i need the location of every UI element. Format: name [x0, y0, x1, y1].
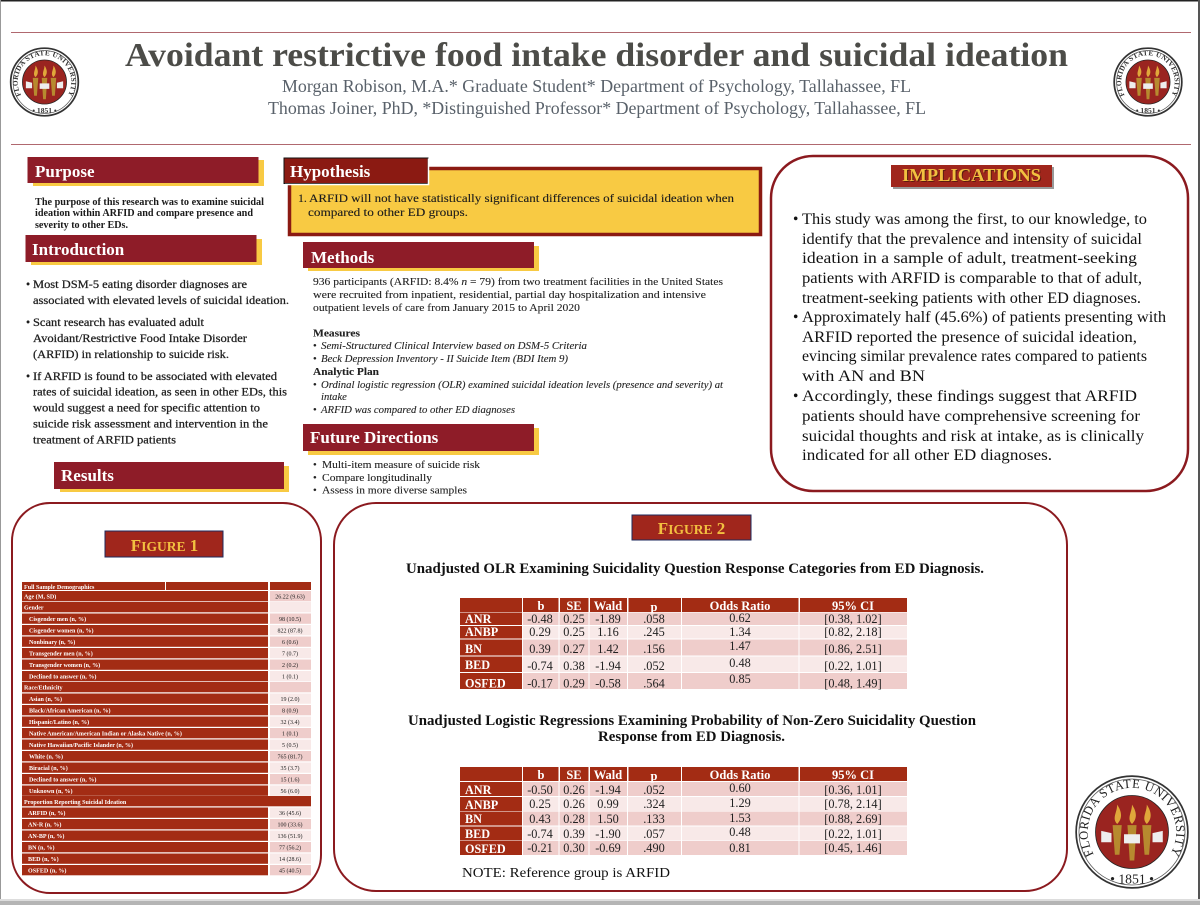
- table: demographics: 77 (56.2): [279, 844, 301, 852]
- heading: Hypothesis: [284, 158, 428, 184]
- table: demographics: AN-R (n, %): [28, 822, 61, 828]
- authors: Morgan Robison, M.A.* Graduate Student* Department of Psychology, Tallahassee, FL: [282, 76, 911, 96]
- table: OLR results: BN: [465, 642, 482, 656]
- table: logistic regression results: OSFED: [465, 842, 506, 856]
- heading: Results: [54, 462, 289, 492]
- table: logistic regression results: -1.94: [595, 783, 621, 797]
- table: demographics: Proportion Reporting Suicidal Ideation: [24, 800, 127, 806]
- panel: implications: patients should have comprehensive screening for: [802, 408, 1140, 425]
- panel: implications: Accordingly, these findings suggest that ARFID: [802, 388, 1137, 405]
- text: methods: ARFID was compared to other ED diagnoses: [320, 405, 515, 416]
- table: OLR results: 0.85: [729, 672, 751, 686]
- text: methods: 936 participants (ARFID: 8.4% n = 79) from two treatment facilities in the United States: [313, 277, 723, 288]
- table: demographics: 765 (81.7): [278, 754, 302, 760]
- table: demographics: 100 (33.6): [278, 822, 302, 828]
- table title: logistic regressions: Response from ED Diagnosis.: [598, 729, 785, 745]
- text: introduction bullets: Scant research has evaluated adult: [33, 315, 205, 329]
- table: demographics: [22, 582, 311, 875]
- table: demographics: Cisgender women (n, %): [29, 628, 94, 634]
- table: logistic regression results: [0.36, 1.01]: [824, 783, 882, 797]
- table: logistic regression results: -0.50: [527, 783, 553, 797]
- table: OLR results: 0.27: [563, 642, 585, 656]
- table: logistic regression results: 0.48: [729, 825, 751, 839]
- table: demographics: Cisgender men (n, %): [29, 616, 86, 623]
- table: OLR results: -0.58: [595, 676, 621, 690]
- table: logistic regression results: 0.39: [563, 827, 585, 841]
- table: logistic regression results: [0.45, 1.46]: [824, 841, 882, 855]
- table: logistic regression results: 0.30: [563, 841, 585, 855]
- table: demographics: 19 (2.0): [280, 696, 300, 703]
- panel: implications: suicidal thoughts and risk at intake, as is clinically: [802, 428, 1144, 445]
- panel: implications: •: [793, 309, 798, 326]
- table: logistic regression results: .052: [643, 783, 665, 797]
- panel: hypothesis: compared to other ED groups.: [308, 205, 468, 219]
- table: demographics: Asian (n, %): [29, 696, 62, 703]
- text: introduction bullets: (ARFID) in relationship to suicide risk.: [33, 347, 229, 361]
- table: logistic regression results: Wald: [594, 768, 622, 782]
- text: future directions: •: [313, 486, 317, 496]
- table: demographics: Transgender women (n, %): [29, 662, 100, 669]
- text: methods: Analytic Plan: [313, 367, 379, 378]
- table: OLR results: BED: [465, 658, 490, 672]
- table: demographics: 822 (87.8): [278, 628, 302, 634]
- heading: Figure 2: FIGURE 2: [658, 519, 725, 538]
- table: demographics: BED (n, %): [28, 856, 59, 863]
- table: logistic regression results: [0.88, 2.69]: [824, 812, 882, 826]
- text: introduction bullets: Most DSM-5 eating disorder diagnoses are: [33, 277, 247, 291]
- panel: hypothesis: 1.: [298, 191, 307, 205]
- heading: Introduction: [26, 235, 262, 265]
- table: logistic regression results: p: [651, 769, 658, 783]
- table: demographics: 1 (0.1): [282, 674, 298, 680]
- table: logistic regression results: 0.60: [729, 781, 751, 795]
- panel: implications: [771, 156, 1188, 491]
- table: logistic regression results: -0.74: [527, 827, 553, 841]
- authors: Thomas Joiner, PhD, *Distinguished Professor* Department of Psychology, Tallahassee, FL: [268, 98, 926, 118]
- text: future directions: Multi-item measure of suicide risk: [322, 460, 481, 471]
- table title: OLR: Unadjusted OLR Examining Suicidality Question Response Categories from ED Diagnosis.: [406, 561, 984, 577]
- table: OLR results: ANBP: [465, 625, 499, 639]
- heading: Implications: [891, 165, 1054, 189]
- table: demographics: 56 (6.0): [280, 788, 300, 795]
- table: OLR results: 0.48: [729, 656, 751, 670]
- table: demographics: 136 (51.9): [278, 833, 302, 840]
- table: OLR results: .052: [643, 659, 665, 673]
- heading: Figure 1: FIGURE 1: [131, 536, 198, 555]
- table: OLR results: b: [538, 599, 545, 613]
- text: methods: Measures: [313, 328, 360, 340]
- table: demographics: 45 (40.5): [279, 868, 301, 874]
- table: demographics: 35 (3.7): [280, 765, 300, 772]
- heading: Purpose: Purpose: [35, 162, 95, 181]
- panel: implications: Approximately half (45.6%) of patients presenting with: [802, 309, 1166, 326]
- text: methods: were recruited from inpatient, residential, partial day hospitalization and intensive: [313, 290, 706, 301]
- logo: FSU seal top right: FLORIDA STATE UNIVERSITY: [1116, 50, 1180, 98]
- heading: Future Directions: Future Directions: [310, 428, 439, 447]
- table: demographics: Unknown (n, %): [29, 788, 73, 795]
- table: demographics: 32 (3.4): [280, 719, 300, 726]
- table: OLR results: 1.42: [597, 642, 619, 656]
- text: future directions: •: [313, 460, 317, 471]
- table: logistic regression results: ANR: [465, 783, 492, 797]
- table: OLR results: 95% CI: [832, 599, 874, 613]
- table: demographics: Age (M, SD): [24, 594, 56, 600]
- table: logistic regression results: .133: [643, 812, 665, 826]
- panel: implications: •: [793, 211, 798, 228]
- table: OLR results: .564: [643, 676, 665, 690]
- table: demographics: White (n, %): [29, 754, 63, 760]
- panel: figure 2: [334, 503, 1067, 891]
- text: future directions: Compare longitudinally: [322, 473, 433, 484]
- table: logistic regression results: 0.25: [529, 797, 551, 811]
- heading: Future Directions: [303, 424, 539, 455]
- table: logistic regression results: 1.50: [597, 812, 619, 826]
- table: OLR results: SE: [566, 599, 582, 613]
- heading: Methods: Methods: [311, 248, 375, 267]
- text: introduction bullets: associated with elevated levels of suicidal ideation.: [33, 293, 289, 307]
- table: demographics: Gender: [24, 606, 44, 612]
- table: logistic regression results: 1.29: [729, 796, 751, 810]
- table: demographics: 1 (0.1): [282, 730, 298, 738]
- text: introduction bullets: Avoidant/Restrictive Food Intake Disorder: [33, 331, 247, 345]
- heading: Methods: [303, 242, 539, 271]
- table: logistic regression results: 0.26: [563, 797, 585, 811]
- table: OLR results: 0.25: [563, 625, 585, 639]
- table: demographics: 8 (0.9): [282, 708, 298, 714]
- table: logistic regression results: .057: [643, 827, 665, 841]
- table: demographics: Declined to answer (n, %): [29, 674, 96, 680]
- table: OLR results: 0.39: [529, 642, 551, 656]
- logo: FSU seal top left: • 1851 •: [32, 106, 57, 115]
- table: logistic regression results: b: [538, 768, 545, 782]
- panel: implications: ARFID reported the presence of suicidal ideation,: [802, 329, 1137, 346]
- heading: Figure 1: [105, 531, 223, 557]
- table: OLR results: .156: [643, 642, 665, 656]
- table: demographics: Biracial (n, %): [29, 765, 68, 772]
- table: OLR results: 1.16: [597, 625, 619, 639]
- table: logistic regression results: 95% CI: [832, 768, 874, 782]
- table: logistic regression results: [0.78, 2.14]: [824, 797, 882, 811]
- table: logistic regression results: 0.43: [529, 812, 551, 826]
- text: introduction bullets: [26, 277, 289, 446]
- text: purpose: severity to other EDs.: [35, 220, 128, 231]
- text: introduction bullets: If ARFID is found to be associated with elevated: [33, 369, 277, 383]
- table: OLR results: ANR: [465, 612, 492, 626]
- panel: implications: identify that the prevalence and intensity of suicidal: [802, 231, 1142, 248]
- text: methods: •: [313, 354, 317, 365]
- text: methods: •: [313, 380, 317, 391]
- table: logistic regression results: 0.26: [563, 783, 585, 797]
- table: demographics: 7 (0.7): [282, 650, 298, 658]
- table: demographics: 15 (1.6): [280, 776, 300, 784]
- table: OLR results: 0.29: [563, 676, 585, 690]
- table: demographics: Nonbinary (n, %): [29, 639, 75, 646]
- panel: hypothesis: ARFID will not have statistically significant differences of suicidal ideation when: [309, 191, 734, 205]
- table title: logistic regressions: [408, 713, 976, 745]
- heading: Hypothesis: Hypothesis: [290, 162, 371, 181]
- table: OLR results: -0.17: [527, 676, 553, 690]
- table: demographics: 14 (28.6): [279, 856, 301, 863]
- title: Avoidant restrictive food intake disorder and suicidal ideation: [125, 37, 1068, 74]
- panel: implications: •: [793, 388, 798, 405]
- heading: Results: Results: [61, 466, 114, 485]
- table: logistic regression results: -0.69: [595, 841, 621, 855]
- heading: Introduction: Introduction: [32, 240, 125, 259]
- panel: implications: evincing similar prevalence rates compared to patients: [802, 348, 1147, 365]
- logo: FSU seal top right: [1113, 47, 1183, 117]
- table: logistic regression results: .490: [643, 841, 665, 855]
- note: NOTE: Reference group is ARFID: [462, 866, 670, 881]
- table: OLR results: [0.82, 2.18]: [824, 625, 882, 639]
- table: demographics: Transgender men (n, %): [29, 650, 93, 658]
- table: demographics: 98 (10.5): [279, 616, 301, 623]
- table: OLR results: [460, 598, 907, 690]
- table: OLR results: -0.74: [527, 659, 553, 673]
- text: introduction bullets: would suggest a need for specific attention to: [33, 400, 260, 414]
- table: demographics: AN-BP (n, %): [28, 833, 64, 840]
- table: demographics: 2 (0.2): [282, 662, 298, 669]
- table title: logistic regressions: Unadjusted Logistic Regressions Examining Probability of Non-Zero Suicidality Question: [408, 713, 976, 729]
- table: OLR results: [0.48, 1.49]: [824, 676, 882, 690]
- table: OLR results: 0.25: [563, 612, 585, 626]
- text: methods: outpatient levels of care from January 2015 to April 2020: [313, 303, 580, 314]
- logo: FSU seal top left: [10, 47, 80, 117]
- heading: Purpose: [28, 157, 264, 186]
- logo: FSU seal top left: FLORIDA STATE UNIVERSITY: [13, 50, 76, 98]
- panel: implications: This study was among the first, to our knowledge, to: [802, 211, 1147, 228]
- table: demographics: Full Sample Demographics: [24, 585, 95, 591]
- text: methods: [313, 277, 724, 416]
- text: purpose: [35, 197, 264, 231]
- heading: Implications: IMPLICATIONS: [902, 165, 1041, 185]
- text: purpose: The purpose of this research was to examine suicidal: [35, 197, 264, 208]
- table: logistic regression results: -1.90: [595, 827, 621, 841]
- text: methods: •: [313, 405, 317, 416]
- panel: implications: ideation in a sample of adult, treatment-seeking: [802, 250, 1137, 267]
- panel: implications: patients with ARFID is comparable to that of adult,: [802, 270, 1142, 287]
- table: logistic regression results: [0.22, 1.01]: [824, 827, 882, 841]
- heading: Implications: IMPLICATIONS: [903, 166, 1042, 186]
- table: demographics: Native American/American Indian or Alaska Native (n, %): [29, 730, 182, 738]
- text: future directions: •: [313, 473, 317, 484]
- text: methods: Ordinal logistic regression (OLR) examined suicidal ideation levels (presence and severity) at: [321, 380, 724, 391]
- table: demographics: BN (n, %): [28, 844, 55, 852]
- table: demographics: Declined to answer (n, %): [29, 776, 96, 784]
- text: methods: •: [313, 341, 317, 352]
- text: methods: Beck Depression Inventory - II Suicide Item (BDI Item 9): [321, 354, 568, 365]
- table: OLR results: .058: [643, 612, 665, 626]
- table: OLR results: -0.48: [527, 612, 553, 626]
- table: OLR results: 0.38: [563, 659, 585, 673]
- text: purpose: ideation within ARFID and compare presence and: [35, 208, 253, 219]
- text: methods: Semi-Structured Clinical Interview based on DSM-5 Criteria: [321, 341, 587, 352]
- table: OLR results: 0.29: [529, 625, 551, 639]
- table: OLR results: 1.47: [729, 639, 751, 653]
- table: OLR results: -1.94: [595, 659, 621, 673]
- panel: figure 1: [12, 503, 321, 893]
- table: logistic regression results: [460, 767, 907, 856]
- text: introduction bullets: suicide risk assessment and intervention in the: [33, 416, 268, 430]
- table: demographics: Native Hawaiian/Pacific Islander (n, %): [29, 742, 133, 749]
- text: introduction bullets: treatment of ARFID patients: [33, 432, 176, 446]
- table: OLR results: [0.22, 1.01]: [824, 659, 882, 673]
- authors: [268, 76, 926, 118]
- table: demographics: Hispanic/Latino (n, %): [29, 719, 89, 726]
- table: OLR results: OSFED: [465, 676, 506, 690]
- table: logistic regression results: 1.53: [729, 811, 751, 825]
- table: demographics: Race/Ethnicity: [24, 686, 63, 692]
- table: OLR results: .245: [643, 625, 665, 639]
- table: OLR results: -1.89: [595, 612, 621, 626]
- table: OLR results: [0.86, 2.51]: [824, 642, 882, 656]
- table: logistic regression results: .324: [643, 797, 665, 811]
- heading: Figure 2: [632, 515, 751, 540]
- table: OLR results: [0.38, 1.02]: [824, 612, 882, 626]
- table: demographics: OSFED (n, %): [28, 868, 66, 874]
- table: OLR results: Odds Ratio: [710, 599, 770, 613]
- table: logistic regression results: 0.99: [597, 797, 619, 811]
- table: demographics: ARFID (n, %): [28, 810, 65, 817]
- table: demographics: 26.22 (9.63): [275, 594, 305, 600]
- table: OLR results: p: [651, 600, 658, 614]
- table: OLR results: 1.34: [729, 625, 751, 639]
- table: logistic regression results: BN: [465, 812, 482, 826]
- panel: implications: with AN and BN: [802, 368, 925, 385]
- text: future directions: [313, 460, 481, 496]
- table: logistic regression results: 0.28: [563, 812, 585, 826]
- table: demographics: Black/African American (n, %): [29, 708, 111, 714]
- table: logistic regression results: SE: [566, 768, 582, 782]
- panel: implications: treatment-seeking patients with other ED diagnoses.: [802, 290, 1141, 307]
- text: introduction bullets: •: [26, 315, 30, 329]
- table: demographics: 6 (0.6): [282, 639, 298, 646]
- table: logistic regression results: Odds Ratio: [710, 768, 770, 782]
- text: introduction bullets: rates of suicidal ideation, as seen in other EDs, this: [33, 384, 287, 398]
- table: logistic regression results: BED: [465, 827, 490, 841]
- panel: implications: indicated for all other ED diagnoses.: [802, 447, 1052, 464]
- table: OLR results: Wald: [594, 599, 622, 613]
- logo: FSU seal bottom right: FLORIDA STATE UNIVERSITY: [1080, 780, 1184, 858]
- panel: hypothesis: [284, 158, 760, 234]
- table: demographics: 5 (0.5): [282, 742, 298, 749]
- logo: FSU seal bottom right: • 1851 •: [1110, 871, 1154, 886]
- table: OLR results: 0.62: [729, 611, 751, 625]
- table: logistic regression results: -0.21: [527, 841, 553, 855]
- text: future directions: Assess in more diverse samples: [322, 486, 467, 496]
- table: demographics: 36 (45.6): [279, 810, 301, 817]
- table: logistic regression results: 0.81: [729, 841, 751, 855]
- logo: FSU seal top right: • 1851 •: [1136, 106, 1160, 115]
- text: introduction bullets: •: [26, 277, 30, 291]
- text: introduction bullets: •: [26, 369, 30, 383]
- text: methods: intake: [321, 392, 347, 403]
- table: logistic regression results: ANBP: [465, 798, 499, 812]
